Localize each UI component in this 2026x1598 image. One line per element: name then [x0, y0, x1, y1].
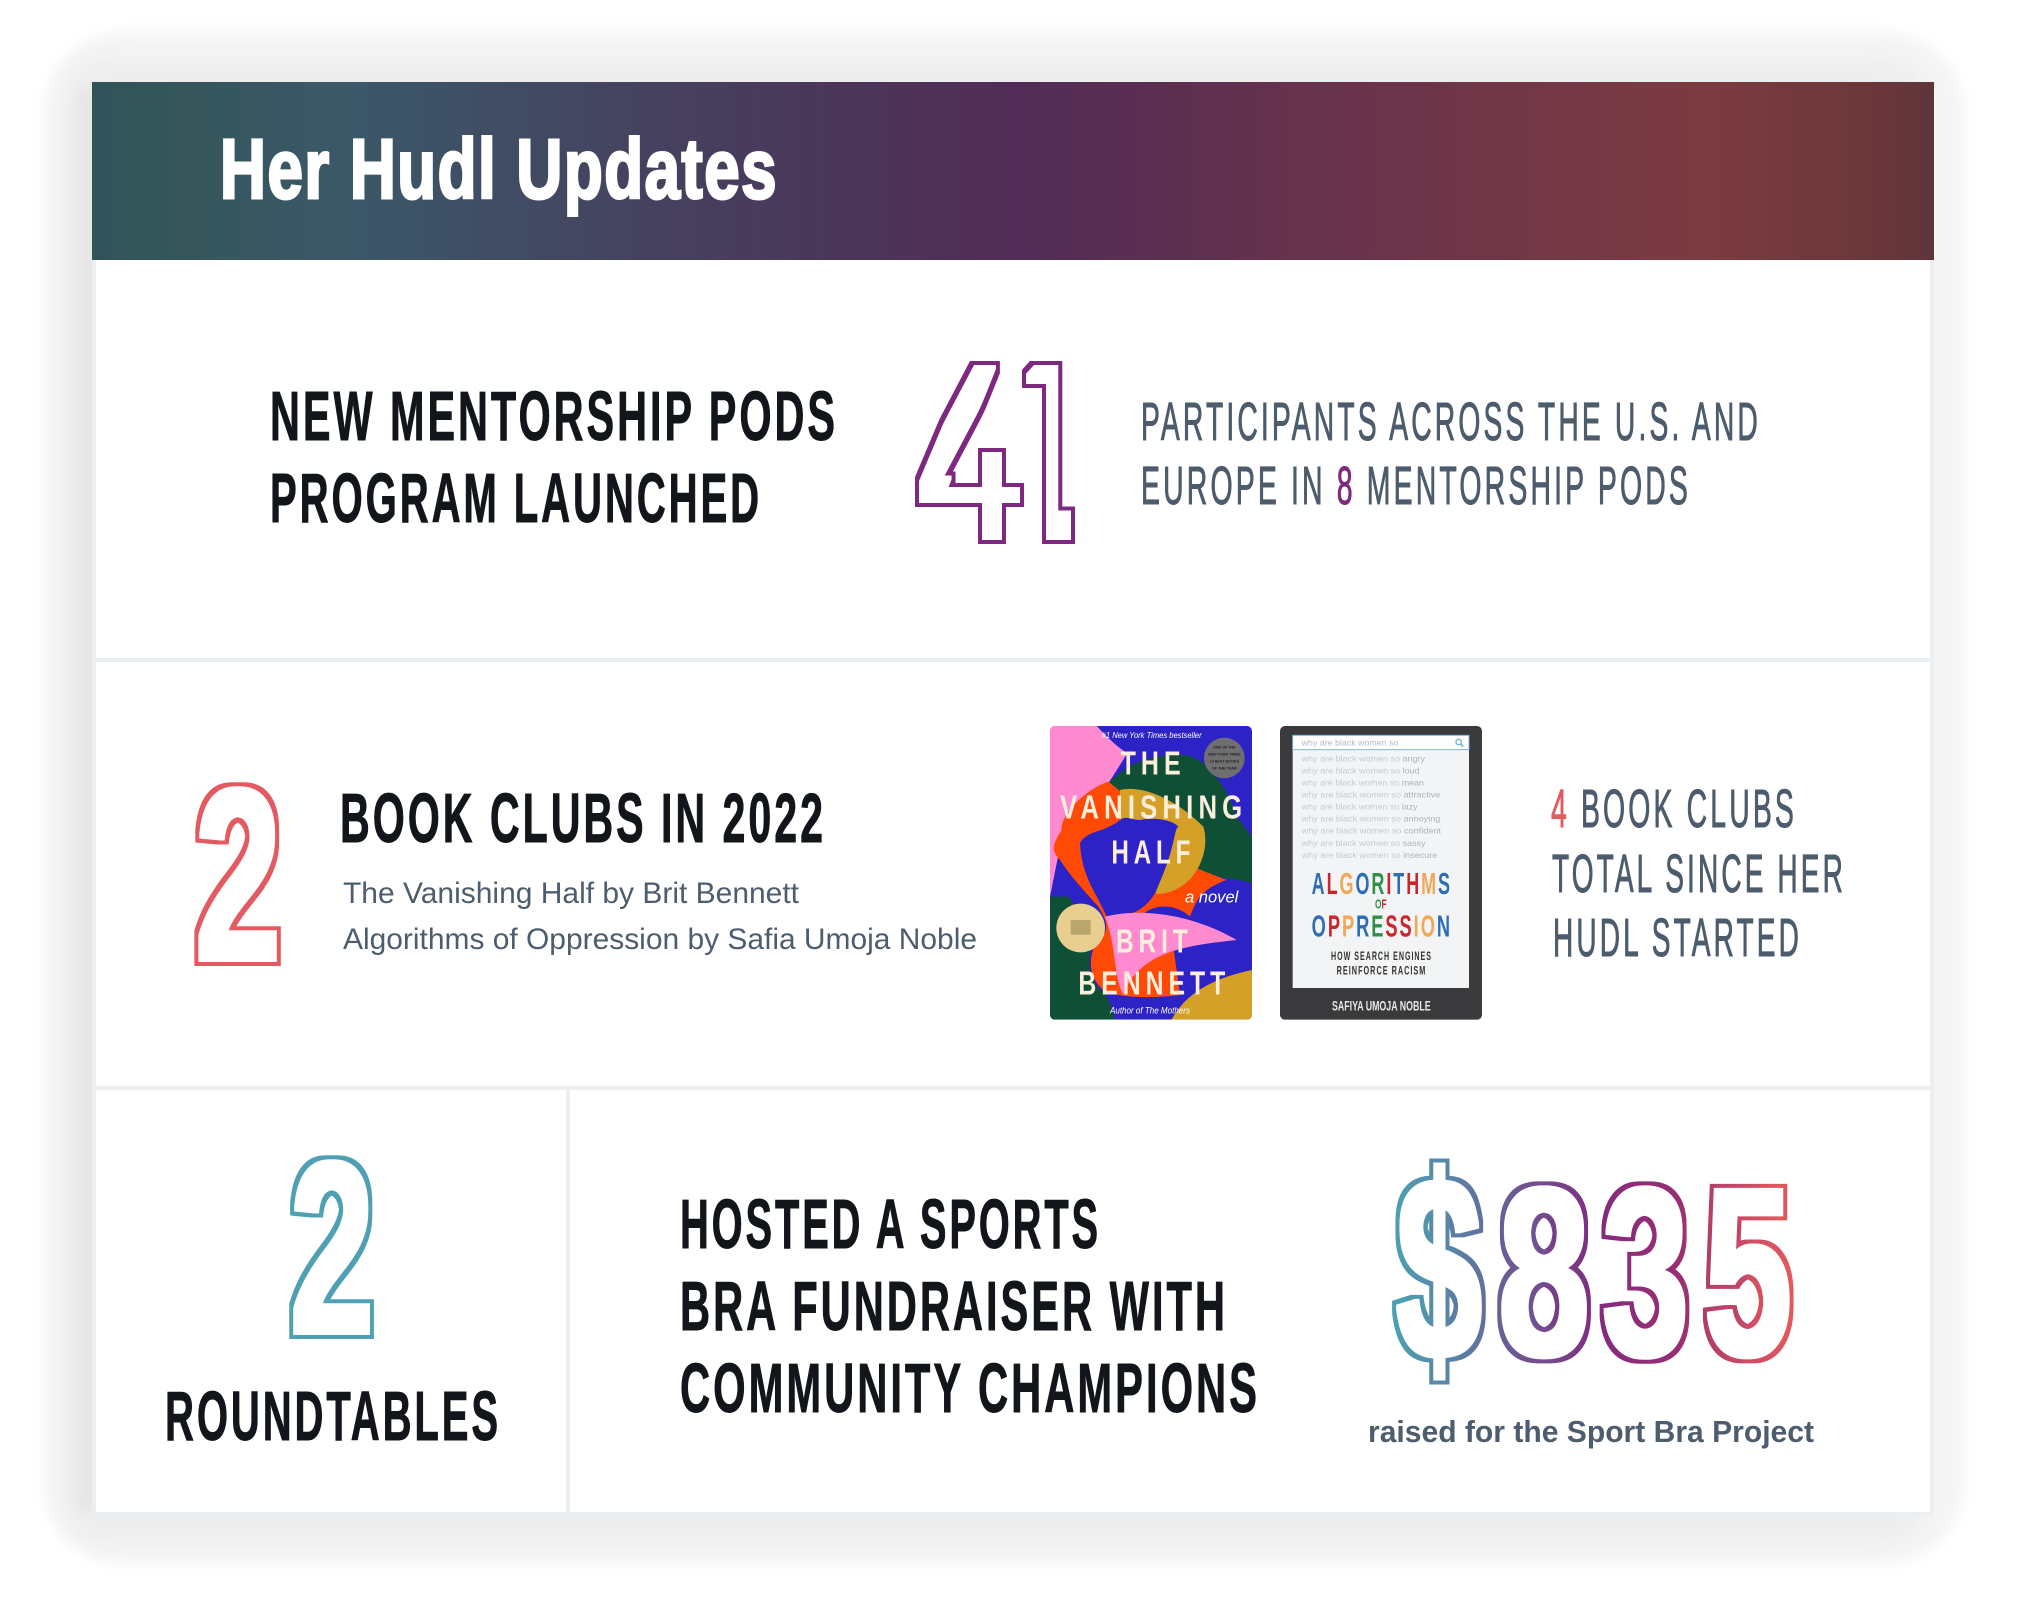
heading: sports bra fundraiser: COMMUNITY CHAMPIONS [680, 1349, 1260, 1427]
book cover: the vanishing half: BRIT [1116, 924, 1193, 961]
book cover: the vanishing half: ONE OF THE [1213, 746, 1236, 750]
big number 41 [915, 361, 1075, 544]
caption: raised for the sport bra project: raised for the Sport Bra Project [1368, 1414, 1814, 1449]
book cover: the vanishing half: VANISHING [1060, 790, 1247, 827]
book cover: the vanishing half [1050, 726, 1252, 1020]
book cover: algorithms of oppression: why are black women so loud [1301, 766, 1420, 776]
book cover: algorithms of oppression: why are black women so confident [1301, 826, 1442, 836]
book cover: algorithms of oppression: OF [1375, 897, 1387, 912]
book cover: algorithms of oppression: ALGORITHMS [1312, 867, 1452, 901]
heading: new mentorship pods: NEW MENTORSHIP PODS [270, 377, 838, 455]
book cover: algorithms of oppression: why are black women so annoying [1301, 814, 1441, 824]
heading: sports bra fundraiser: BRA FUNDRAISER WITH [680, 1267, 1228, 1345]
panel: mentorship pods [272, 361, 1757, 544]
book cover: the vanishing half: 10 BEST BOOKS [1210, 759, 1240, 763]
panel: book clubs [195, 726, 1846, 1020]
header banner [92, 82, 1934, 260]
book cover: algorithms of oppression: why are black women so attractive [1301, 790, 1441, 800]
book cover: algorithms of oppression: why are black women so [1301, 738, 1399, 748]
book cover: the vanishing half: THE [1121, 745, 1186, 782]
book cover: algorithms of oppression: OPPRESSION [1312, 910, 1452, 944]
four book clubs text: 4 BOOK CLUBS [1551, 779, 1797, 839]
panel: roundtables [165, 1111, 501, 1455]
big number 835 dollars: 8 [1498, 1138, 1590, 1406]
big number 2 teal: 2 [290, 1111, 374, 1386]
book cover: algorithms of oppression: why are black women so sassy [1301, 838, 1426, 848]
heading: roundtables: ROUNDTABLES [165, 1377, 501, 1455]
book cover: the vanishing half: Author of The Mothers [1109, 1005, 1190, 1015]
big number 835 dollars: 5 [1704, 1138, 1792, 1406]
book cover: the vanishing half: NEW YORK TIMES [1208, 753, 1241, 757]
heading: sports bra fundraiser [680, 1185, 1260, 1427]
book list [343, 877, 977, 956]
title: Her Hudl Updates [220, 122, 778, 216]
book cover: algorithms of oppression: why are black women so mean [1301, 778, 1424, 788]
book list: Algorithms of Oppression by Safia Umoja Noble [343, 923, 977, 956]
book cover: algorithms of oppression: why are black women so angry [1301, 754, 1426, 764]
participants text: EUROPE IN 8 MENTORSHIP PODS [1141, 456, 1691, 516]
book cover: algorithms of oppression: SAFIYA UMOJA NOBLE [1332, 998, 1431, 1014]
book cover: the vanishing half: a novel [1185, 888, 1240, 907]
four book clubs text: HUDL STARTED [1553, 908, 1802, 968]
book cover: the vanishing half: #1 New York Times bestseller [1102, 730, 1203, 740]
big number 835 dollars [1396, 1122, 1792, 1415]
heading: new mentorship pods: PROGRAM LAUNCHED [270, 459, 762, 537]
book cover: algorithms of oppression: why are black women so lazy [1301, 802, 1418, 812]
big number 835 dollars: 3 [1602, 1138, 1689, 1406]
book list: The Vanishing Half by Brit Bennett [343, 877, 800, 910]
book cover: algorithms of oppression [1280, 726, 1482, 1020]
book cover: algorithms of oppression: HOW SEARCH ENGINES [1331, 949, 1432, 963]
panel: fundraiser [680, 1122, 1814, 1449]
book cover: the vanishing half: HALF [1111, 834, 1195, 871]
book cover: the vanishing half: OF THE YEAR [1212, 766, 1237, 770]
book cover: the vanishing half: BENNETT [1078, 966, 1230, 1003]
book cover: algorithms of oppression: why are black women so insecure [1301, 850, 1438, 860]
four book clubs text [1551, 779, 1846, 968]
heading: new mentorship pods [270, 377, 838, 537]
big number 835 dollars: $ [1396, 1122, 1482, 1415]
heading: sports bra fundraiser: HOSTED A SPORTS [680, 1185, 1101, 1263]
big number 41: 4 [915, 312, 1027, 591]
big number 41: 1 [1001, 312, 1084, 591]
book cover: algorithms of oppression: REINFORCE RACISM [1337, 963, 1426, 977]
big number 2 red: 2 [195, 738, 281, 1013]
heading: book clubs in 2022: BOOK CLUBS IN 2022 [340, 779, 826, 857]
panel: card body [92, 240, 1934, 1516]
participants text [1141, 392, 1761, 516]
